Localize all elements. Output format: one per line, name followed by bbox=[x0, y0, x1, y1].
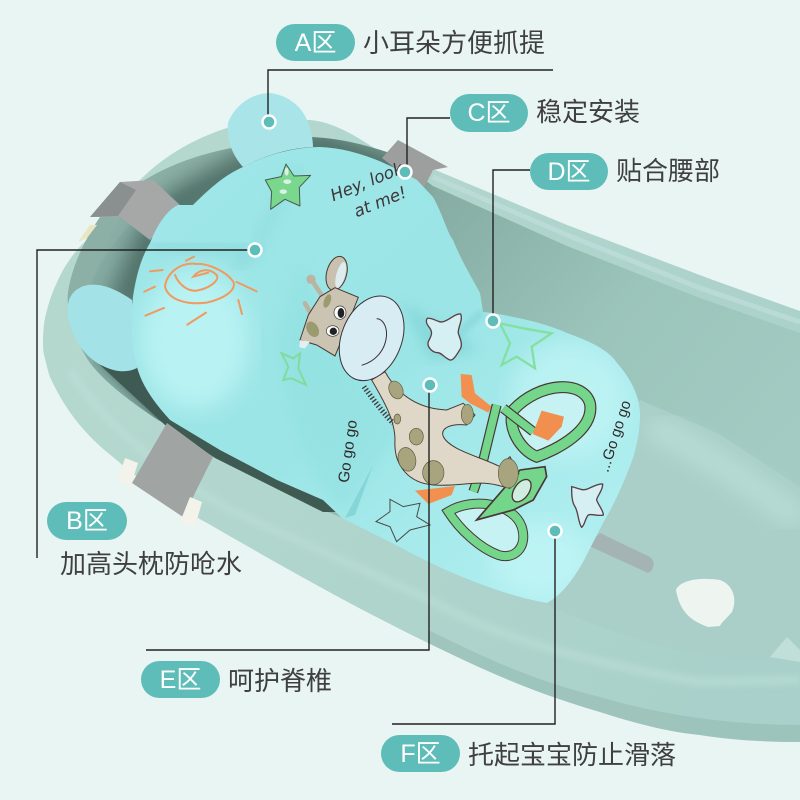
label E: E区 bbox=[160, 666, 201, 694]
baby bath pad bbox=[132, 147, 640, 603]
label F: 托起宝宝防止滑落 bbox=[468, 740, 676, 770]
label E bbox=[141, 661, 332, 698]
dark mesh under pad bbox=[100, 340, 342, 512]
icon: orange sun bbox=[144, 257, 257, 325]
tub interior bbox=[68, 137, 800, 520]
slogan text: at me! bbox=[351, 183, 409, 221]
rear wheel bbox=[448, 504, 523, 556]
orange seat bbox=[461, 374, 492, 413]
label B: B区 bbox=[66, 507, 108, 535]
label C bbox=[450, 94, 640, 132]
giraffe snout bbox=[327, 286, 416, 390]
tub rim bbox=[43, 120, 800, 742]
slogan text: Hey, look bbox=[328, 158, 407, 205]
light band front rim bbox=[70, 370, 800, 682]
label D bbox=[530, 153, 720, 190]
icon: green star bbox=[265, 164, 311, 209]
callout lines bbox=[37, 70, 555, 724]
bathtub bbox=[43, 120, 800, 742]
giraffe head bbox=[299, 288, 358, 356]
label C: C区 bbox=[467, 99, 511, 127]
go go text left: Go go go bbox=[335, 419, 361, 484]
go go text right: ...Go go go bbox=[596, 398, 635, 474]
ear left bbox=[68, 285, 137, 371]
giraffe mane bbox=[364, 387, 393, 423]
callout dots bbox=[248, 116, 562, 538]
label A bbox=[276, 24, 545, 61]
giraffe spots bbox=[386, 379, 518, 488]
darker rim underside bbox=[428, 630, 800, 742]
giraffe eyes bbox=[326, 306, 346, 336]
giraffe body bbox=[372, 372, 519, 488]
giraffe on bicycle bbox=[282, 254, 603, 556]
bike frame bbox=[473, 405, 533, 492]
label E: 呵护脊椎 bbox=[228, 666, 332, 696]
front wheel bbox=[512, 387, 590, 457]
grey strap lower left with clips bbox=[118, 423, 213, 527]
label D: D区 bbox=[547, 158, 591, 186]
label F: F区 bbox=[400, 740, 441, 768]
label C: 稳定安装 bbox=[536, 97, 640, 127]
giraffe ear and horn bbox=[305, 254, 351, 315]
white sponge bbox=[676, 579, 734, 627]
strap loop lower right bbox=[587, 533, 654, 573]
label B: 加高头枕防呛水 bbox=[60, 549, 242, 579]
label B bbox=[47, 502, 242, 579]
label A: A区 bbox=[295, 29, 336, 57]
notch right bbox=[770, 637, 800, 662]
grey strap upper right bbox=[382, 140, 448, 190]
light lip top bbox=[433, 177, 800, 322]
pad artwork: sun, star, slogan bbox=[144, 158, 409, 325]
label D: 贴合腰部 bbox=[616, 156, 720, 186]
tub floor bbox=[543, 400, 718, 614]
pedal bbox=[477, 467, 547, 520]
label F bbox=[381, 735, 676, 772]
label A: 小耳朵方便抓提 bbox=[363, 28, 545, 58]
ear top bbox=[228, 93, 313, 167]
grey strap upper left bbox=[78, 180, 180, 242]
orange lantern bbox=[533, 411, 564, 441]
star outlines bbox=[426, 314, 461, 360]
